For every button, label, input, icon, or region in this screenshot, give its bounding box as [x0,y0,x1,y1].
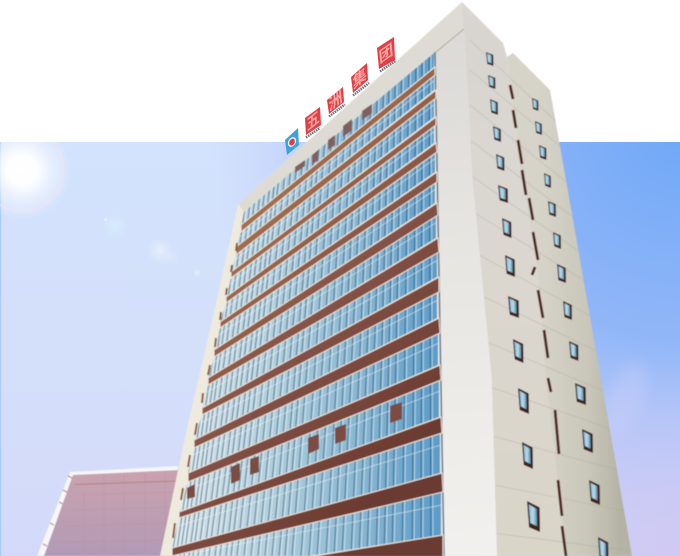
central groove between east bays [510,85,566,556]
small brown tabs on left wall [173,243,237,538]
sign characters: 五 [306,108,320,135]
east face windows, outer column [532,98,608,556]
sign characters: 洲 [328,88,343,115]
tower wall: white corner pier [436,2,497,556]
tower wall: east face, first bay [462,2,567,556]
sign characters: 团 [378,41,394,67]
east face windows, inner column [486,52,540,532]
sign small print strips [306,60,396,138]
low pink building, bottom left [37,466,180,556]
main tower [160,2,640,556]
sky background panel [0,120,680,556]
sign logo [285,128,299,155]
sign characters [305,37,395,135]
tower wall: glazed front and roof band [160,2,464,556]
glazing rows [168,50,444,556]
lens flares [104,218,199,276]
sun glare with halo [0,142,66,214]
brown spandrel bands [172,67,443,556]
tower wall: east face, second bay [507,53,632,556]
sign characters: 集 [352,64,367,93]
rooftop sign [285,37,396,155]
dark replaced panels in glazing [187,104,402,499]
